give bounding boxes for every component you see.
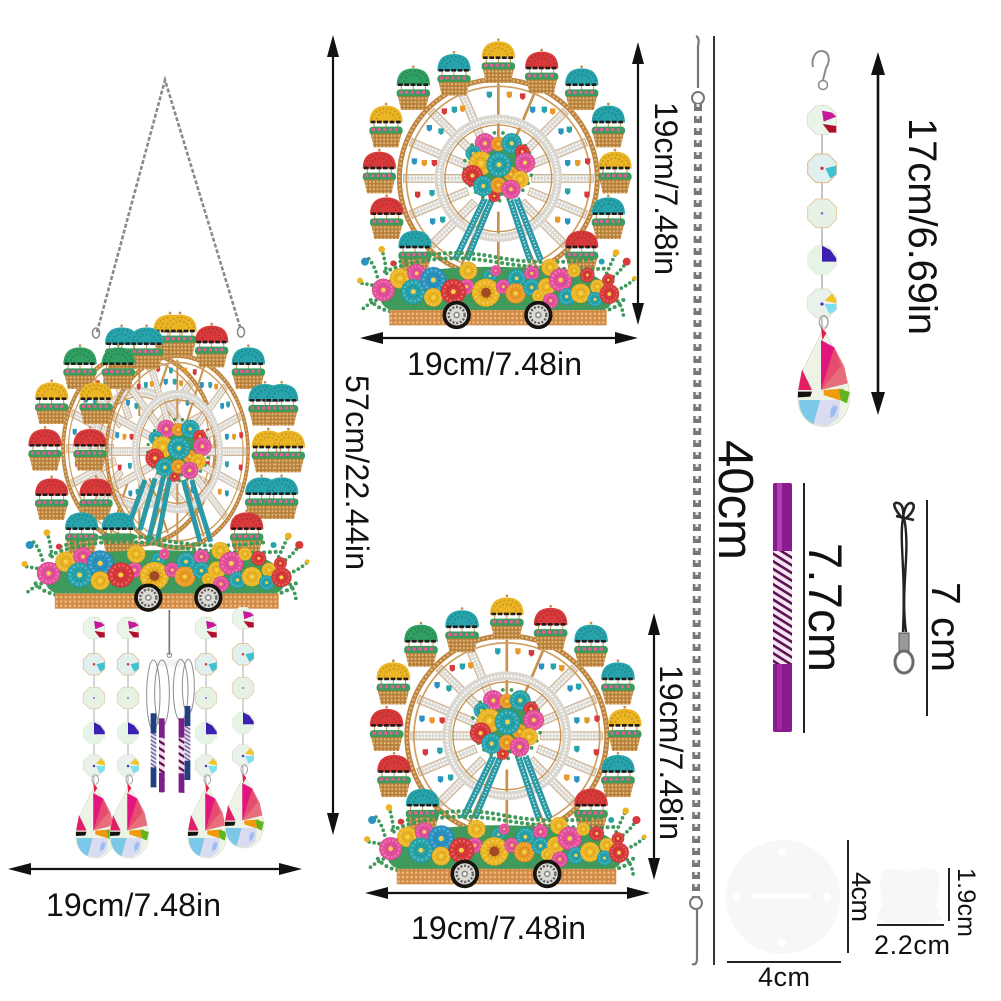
dimension: plate height: 1.9cm bbox=[952, 868, 980, 937]
dimension: disc height bbox=[846, 840, 876, 953]
dimension: bottom wheel height: 19cm/7.48in bbox=[653, 665, 689, 840]
crystal strand 1 bbox=[76, 617, 115, 858]
wind chime tubes bbox=[147, 610, 194, 793]
dimension: disc width bbox=[727, 962, 841, 992]
dimension: bottom wheel width: 19cm/7.48in bbox=[411, 910, 586, 946]
dimension: overall width bbox=[8, 863, 302, 923]
dimension: cord length: 7 cm bbox=[923, 582, 969, 672]
dimension: top wheel width: 19cm/7.48in bbox=[407, 346, 582, 382]
crystal strand 2 bbox=[110, 617, 149, 858]
top Ferris wheel panel bbox=[357, 38, 637, 327]
dimension: bottom wheel width bbox=[365, 887, 650, 946]
dimension: bottom wheel height bbox=[648, 613, 689, 880]
dimension: plate width: 2.2cm bbox=[874, 930, 950, 960]
clear round disc bbox=[726, 840, 840, 954]
crystal strand 4 bbox=[225, 607, 264, 848]
dimension: overall height: 57cm/22.44in bbox=[339, 375, 375, 570]
double Ferris wheel bbox=[22, 312, 310, 610]
dimension: disc height: 4cm bbox=[846, 872, 876, 922]
crystal strand 3 bbox=[188, 617, 227, 858]
clear small plate bbox=[876, 868, 942, 923]
dimension: top wheel height bbox=[632, 42, 684, 325]
dimension: top wheel width bbox=[360, 332, 638, 382]
left panel: assembled wind chime bbox=[22, 80, 310, 858]
dimension: overall height bbox=[327, 35, 375, 835]
bottom Ferris wheel panel bbox=[364, 594, 647, 886]
dimension: crystal strand bbox=[871, 52, 944, 415]
hanging chain bbox=[92, 80, 244, 338]
dimension: overall width: 19cm/7.48in bbox=[46, 887, 221, 923]
dimension: top wheel height: 19cm/7.48in bbox=[648, 102, 684, 275]
long chain with hooks bbox=[690, 36, 704, 964]
black lanyard cord bbox=[894, 503, 914, 673]
dimension: pen length: 7.7cm bbox=[799, 543, 852, 672]
purple drill pen bbox=[773, 483, 792, 732]
dimension: disc width: 4cm bbox=[758, 962, 810, 992]
dimension: crystal strand: 17cm/6.69in bbox=[900, 118, 944, 335]
single crystal strand with hook bbox=[798, 51, 850, 427]
dimension: chain length: 40cm bbox=[708, 440, 762, 560]
